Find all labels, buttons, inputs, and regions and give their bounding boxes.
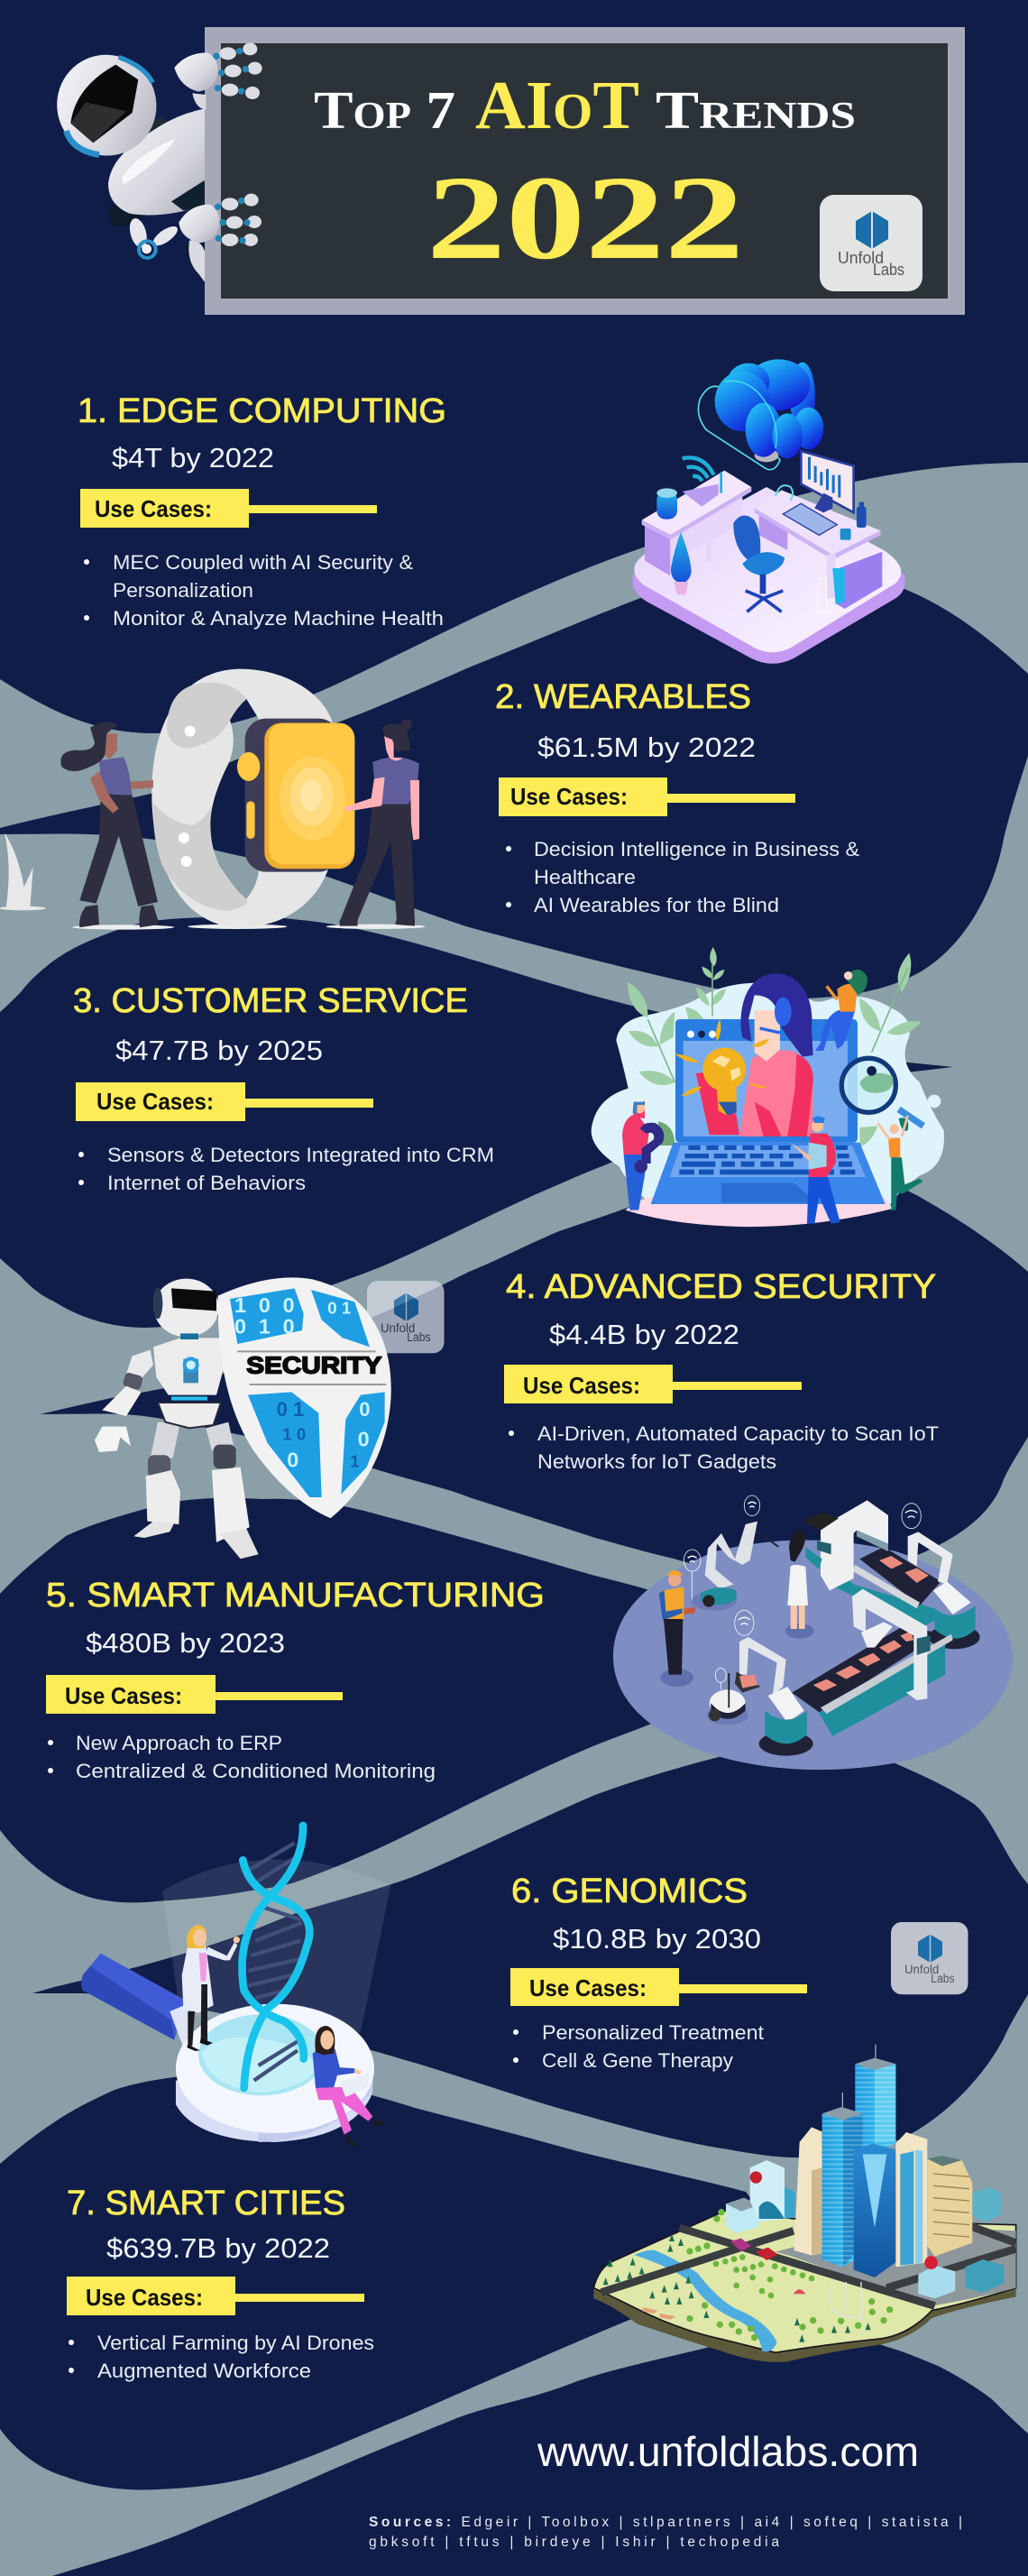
- use cases tag: Use Cases:: [95, 495, 212, 522]
- illustration: isometric smart city island: [593, 2045, 1016, 2362]
- bullet list: Augmented Workforce: [97, 2360, 311, 2382]
- panel: 3 customer service: [73, 982, 494, 1194]
- bullet list: Internet of Behaviors: [107, 1172, 306, 1194]
- illustration: robot holding security shield: 0: [359, 1398, 371, 1421]
- use cases tag: [80, 489, 377, 528]
- bullet list: Monitor & Analyze Machine Health: [113, 607, 444, 630]
- heading: 3. CUSTOMER SERVICE: [73, 982, 468, 1020]
- logo: Unfold Labs: Unfold: [838, 249, 884, 267]
- logo: Unfold Labs badge: Unfold: [904, 1963, 939, 1976]
- sources: Sources: Edgeir | Toolbox | stlpartners | ai4 | softeq | statista |: [369, 2515, 962, 2530]
- illustration: robot holding security shield: 0 1: [327, 1299, 351, 1318]
- title line: TRENDS: [656, 80, 856, 140]
- sources: gbksoft | tftus | birdeye | Ishir | techopedia: [369, 2535, 779, 2550]
- logo: Unfold Labs watermark: [367, 1281, 444, 1353]
- logo: Unfold Labs watermark: Unfold: [381, 1321, 415, 1335]
- illustration: smartwatch with two people: [0, 669, 426, 930]
- heading: 1. EDGE COMPUTING: [78, 392, 446, 430]
- bullet list: AI Wearables for the Blind: [534, 894, 779, 916]
- bullet list: [513, 2021, 764, 2072]
- market size: $47.7B by 2025: [115, 1035, 323, 1066]
- logo: Unfold Labs watermark: Labs: [407, 1330, 431, 1344]
- illustration: customer service agent on laptop: [592, 947, 944, 1227]
- heading: 6. GENOMICS: [511, 1872, 748, 1910]
- use cases tag: [504, 1365, 802, 1403]
- panel: 7 smart cities: [67, 2185, 374, 2382]
- use cases tag: [76, 1082, 373, 1121]
- use cases tag: Use Cases:: [529, 1974, 647, 2001]
- use cases tag: [46, 1675, 343, 1714]
- panel: 5 smart manufacturing: [46, 1577, 545, 1782]
- bullet list: Healthcare: [534, 866, 636, 888]
- panel: 6 genomics: [510, 1872, 807, 2072]
- title line: TOP 7: [314, 80, 455, 140]
- year: 2022: [427, 151, 744, 284]
- illustration: robot holding security shield: SECURITY: [246, 1352, 381, 1379]
- heading: 5. SMART MANUFACTURING: [46, 1577, 545, 1615]
- robot peeking behind the title board: [42, 41, 207, 286]
- use cases tag: Use Cases:: [523, 1372, 640, 1399]
- bullet list: Sensors & Detectors Integrated into CRM: [107, 1144, 494, 1166]
- logo: Unfold Labs badge: [891, 1922, 968, 1994]
- illustration: robot holding security shield: 0 1 0: [234, 1314, 295, 1338]
- use cases tag: Use Cases:: [65, 1682, 182, 1709]
- illustration: robot holding security shield: 0: [358, 1427, 370, 1450]
- bullet list: [48, 1732, 436, 1782]
- bullet list: [509, 1422, 939, 1473]
- illustration: robot holding security shield: [95, 1277, 391, 1559]
- logo: Unfold Labs: [820, 195, 922, 291]
- title line: AIOT: [475, 68, 639, 143]
- use cases tag: Use Cases:: [510, 783, 628, 810]
- bullet list: [84, 551, 444, 630]
- market size: $4.4B by 2022: [549, 1319, 739, 1350]
- illustration: robot holding security shield: 0: [287, 1449, 298, 1472]
- bullet list: [78, 1144, 494, 1194]
- market size: $10.8B by 2030: [553, 1923, 761, 1955]
- illustration: robot holding security shield: 1: [350, 1452, 360, 1471]
- use cases tag: [499, 777, 795, 816]
- heading: 2. WEARABLES: [495, 678, 751, 716]
- bullet list: Decision Intelligence in Business &: [534, 838, 859, 860]
- bullet list: Networks for IoT Gadgets: [537, 1450, 776, 1473]
- use cases tag: Use Cases:: [96, 1088, 214, 1115]
- bullet list: Cell & Gene Therapy: [542, 2049, 733, 2072]
- panel: 1 edge computing: [78, 392, 446, 630]
- bullet list: MEC Coupled with AI Security &: [113, 551, 413, 574]
- illustration: DNA under magnifying glass: [81, 1826, 390, 2147]
- heading: 7. SMART CITIES: [67, 2185, 345, 2222]
- panel: 2 wearables: [495, 678, 859, 916]
- bullet list: AI-Driven, Automated Capacity to Scan IoT: [537, 1422, 939, 1445]
- bullet list: New Approach to ERP: [76, 1732, 282, 1754]
- website url: www.unfoldlabs.com: [537, 2428, 919, 2475]
- title line: [314, 68, 856, 143]
- bullet list: Personalization: [113, 579, 253, 602]
- illustration: robot holding security shield: 1 0 0: [234, 1293, 295, 1317]
- heading: 4. ADVANCED SECURITY: [506, 1268, 936, 1306]
- panel: 4 advanced security: [504, 1268, 939, 1473]
- bullet list: [506, 838, 859, 916]
- use cases tag: [510, 1968, 807, 2006]
- bullet list: [69, 2332, 374, 2382]
- market size: $4T by 2022: [112, 442, 274, 474]
- illustration: isometric edge computing desk: [633, 359, 904, 664]
- sources: [369, 2515, 962, 2550]
- logo: Unfold Labs: Labs: [873, 261, 904, 279]
- illustration: robot holding security shield: 0 1: [277, 1398, 304, 1421]
- robot hands gripping the board: [174, 42, 262, 246]
- title board: [205, 27, 965, 315]
- bullet list: Centralized & Conditioned Monitoring: [76, 1760, 436, 1782]
- use cases tag: Use Cases:: [86, 2284, 203, 2311]
- use cases tag: [67, 2277, 364, 2315]
- market size: $639.7B by 2022: [106, 2232, 330, 2264]
- illustration: smart factory conveyor lines: [613, 1495, 1013, 1770]
- market size: $61.5M by 2022: [537, 731, 756, 763]
- logo: Unfold Labs badge: Labs: [931, 1972, 955, 1985]
- market size: $480B by 2023: [86, 1627, 285, 1659]
- bullet list: Personalized Treatment: [542, 2021, 764, 2044]
- illustration: robot holding security shield: 1 0: [282, 1425, 306, 1444]
- bullet list: Vertical Farming by AI Drones: [97, 2332, 374, 2354]
